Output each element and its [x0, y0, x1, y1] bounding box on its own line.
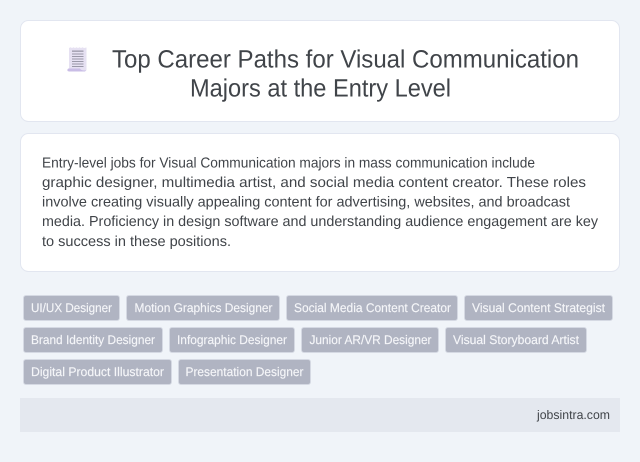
- title: [112, 46, 579, 102]
- tag: Motion Graphics Designer: Motion Graphics Designer: [134, 301, 272, 315]
- tag: Visual Storyboard Artist: Visual Storyboard Artist: [453, 333, 580, 347]
- tag: Infographic Designer: Infographic Designer: [177, 333, 287, 347]
- text block: description: media. Proficiency in design software and understanding audience engagement are key: [42, 214, 599, 230]
- footer source text: jobsintra.com: [536, 408, 610, 422]
- tag: Digital Product Illustrator: Digital Product Illustrator: [31, 365, 164, 379]
- tag: Junior AR/VR Designer: Junior AR/VR Designer: [310, 333, 432, 347]
- tag: UI/UX Designer: UI/UX Designer: [31, 301, 112, 315]
- tag: Junior AR/VR Designer: [302, 328, 438, 352]
- tag: Visual Content Strategist: Visual Content Strategist: [472, 301, 605, 315]
- panel: title card: [20, 20, 620, 122]
- title: Top Career Paths for Visual Communication: [112, 46, 579, 74]
- text block: description: Entry-level jobs for Visual Communication majors in mass communication include: [42, 156, 535, 172]
- tag: Visual Storyboard Artist: [446, 328, 586, 352]
- tag: Visual Content Strategist: [464, 296, 612, 320]
- tag: Infographic Designer: [170, 328, 294, 352]
- text block: description: graphic designer, multimedia artist, and social media content creator. These roles: [42, 175, 586, 191]
- tag: Brand Identity Designer: Brand Identity Designer: [31, 333, 155, 347]
- tag: Motion Graphics Designer: [126, 296, 280, 320]
- icon: document scroll: [67, 47, 86, 72]
- tag: Brand Identity Designer: [24, 328, 162, 352]
- text block: description: [42, 156, 599, 250]
- text block: description: to success in these positions.: [42, 234, 231, 250]
- title: Majors at the Entry Level: [190, 74, 451, 102]
- tag: UI/UX Designer: [24, 296, 120, 320]
- tag list: [24, 296, 612, 384]
- tag: Digital Product Illustrator: [24, 360, 172, 384]
- tag: Social Media Content Creator: Social Media Content Creator: [294, 301, 451, 315]
- tag: Presentation Designer: Presentation Designer: [186, 365, 304, 379]
- panel: description: [20, 134, 620, 272]
- footer bar: [20, 398, 620, 432]
- text block: description: involve creating visually appealing content for advertising, websites, and broadcast: [42, 195, 570, 211]
- tag: Social Media Content Creator: [286, 296, 458, 320]
- tag: Presentation Designer: [178, 360, 310, 384]
